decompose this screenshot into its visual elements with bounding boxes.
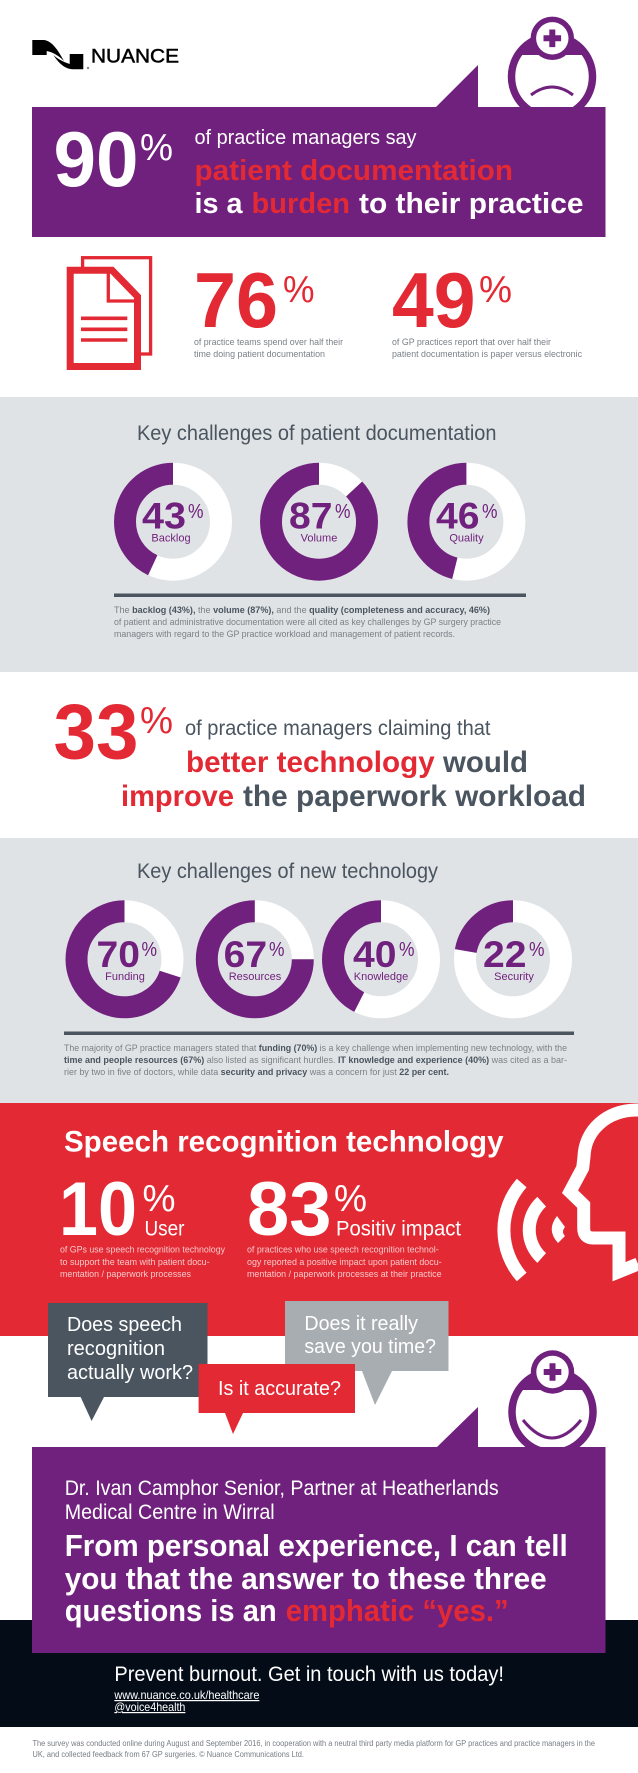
headline: better technology: better technology [186,746,435,779]
stat: 76%: % [283,269,314,311]
attribution [65,1477,499,1524]
band: new technology background [0,838,638,1103]
speech bubble: does speech recognition work: recognition [67,1338,165,1360]
donut: knowledge 40%: Knowledge [354,971,408,983]
stat: 10% users: % [142,1178,176,1220]
donut: security 22%: 22 [483,933,526,975]
call to action [113,1663,504,1714]
speech bubble: is it accurate [199,1364,355,1434]
donut: resources 67% [207,911,303,1007]
donut: quality 46%: % [482,501,498,523]
donut: security 22%: Security [494,971,534,983]
donut: resources 67%: Resources [229,971,282,983]
stat: 49% [392,256,582,359]
speech bubble: does speech recognition work: Does speech [67,1314,182,1336]
donut: backlog 43%: 43 [142,494,186,536]
text: patient documentation explanation: The backlog (43%), the volume (87%), and the quality (completeness and accuracy, 46%) [114,604,490,615]
headline: better technology: of practice managers claiming that [185,716,491,740]
headline: better technology [121,716,586,813]
speech bubble: save you time: save you time? [304,1336,436,1358]
quote text: emphatic “yes.” [286,1593,509,1628]
stat: 10% users [59,1167,225,1279]
speech bubble: does speech recognition work [48,1303,208,1421]
stat: 10% users: 10 [59,1167,137,1252]
call to action: @voice4health [114,1700,185,1714]
stat: 49%: % [479,269,512,311]
stat: 83% positive impact: % [334,1178,367,1220]
stat: 76% [194,256,343,359]
stat: 10% users: User [144,1218,185,1241]
stat: 83% positive impact: mentation / paperwork processes at their practice [247,1268,442,1279]
heading: speech recognition technology: Speech recognition technology [64,1126,504,1159]
headline: better technology: would [442,746,528,779]
stat: 49%: of GP practices report that over half their [392,336,551,347]
text: patient documentation explanation: of patient and administrative documentation were all cited as key challenges by GP surgery practice [114,616,501,627]
text: new technology explanation: The majority of GP practice managers stated that funding (70%) is a key challenge when implementing new technology, with the [64,1042,567,1053]
donut: funding 70% [76,911,172,1007]
band: patient documentation background [0,397,638,672]
panel: doctor quote [32,1407,606,1653]
speech bubble: save you time: Does it really [304,1313,418,1335]
headline text: burden [252,188,350,220]
donut: backlog 43% [125,474,221,570]
footnote [32,1738,595,1759]
heading: key challenges of patient documentation: Key challenges of patient documentation [137,422,496,445]
stat: 10% users: to support the team with patient docu- [60,1256,210,1267]
donut: security 22%: % [529,939,545,961]
text: new technology explanation [64,1042,567,1077]
logo: Nuance: NUANCE [91,46,179,68]
icon: speaking head [504,1110,638,1277]
text: patient documentation explanation: managers with regard to the GP practice workload and management of patient records. [114,628,455,639]
donut: volume 87%: % [335,501,351,523]
donut: resources 67%: 67 [224,933,267,975]
headline text: to their practice [359,188,584,220]
band: footer call to action background [0,1620,638,1727]
footnote: UK, and collected feedback from 67 GP surgeries. © Nuance Communications Ltd. [32,1749,304,1759]
call to action: www.nuance.co.uk/healthcare [113,1688,260,1702]
icon: sad doctor [512,17,592,117]
stat: 83% positive impact: 83 [247,1167,332,1252]
stat: 83% positive impact [247,1167,461,1279]
headline text: is a [194,188,243,220]
headline: better technology: improve [121,780,234,813]
text: new technology explanation: time and people resources (67%) also listed as significant hurdles. IT knowledge and experience (40%) was cited as a bar- [64,1054,567,1065]
speech bubble: is it accurate: Is it accurate? [218,1378,341,1400]
donut: resources 67%: % [269,939,285,961]
headline text: patient documentation [194,155,513,187]
logo: Nuance [32,40,179,69]
attribution: Medical Centre in Wirral [65,1501,275,1524]
text: new technology explanation: rier by two in five of doctors, while data security and privacy was a concern for just 22 per cent. [64,1066,449,1077]
donut: knowledge 40%: % [399,939,415,961]
donut: knowledge 40%: 40 [353,933,396,975]
heading: key challenges of new technology: Key challenges of new technology [137,860,438,883]
stat: 90%: 90 [54,115,138,203]
text: patient documentation explanation [114,604,501,639]
headline text: of practice managers say [194,126,417,149]
stat: 10% users: mentation / paperwork processes [60,1268,191,1279]
stat: 10% users: of GPs use speech recognition technology [60,1244,225,1255]
stat: 83% positive impact: Positiv impact [336,1218,461,1241]
stat: 83% positive impact: ogy reported a positive impact upon patient docu- [247,1256,442,1267]
band: speech recognition background [0,1103,638,1336]
speech bubble: does speech recognition work: actually work? [67,1362,193,1384]
speech bubble: save you time [285,1301,448,1405]
stat: 76%: 76 [194,256,278,344]
quote text [65,1528,568,1628]
stat: 49%: patient documentation is paper versus electronic [392,348,582,359]
icon: documents [70,258,151,366]
donut: quality 46%: 46 [436,494,480,536]
donut: quality 46% [418,474,514,570]
attribution: Dr. Ivan Camphor Senior, Partner at Heatherlands [65,1477,499,1500]
call to action: Prevent burnout. Get in touch with us today! [114,1663,504,1686]
headline: better technology: the paperwork workload [243,780,586,813]
donut: funding 70%: 70 [96,933,140,975]
stat: 90%: % [140,127,173,169]
stat: 33%: 33 [54,688,138,776]
donut: quality 46%: Quality [449,533,484,545]
donut: volume 87%: Volume [301,533,337,545]
donut: volume 87%: 87 [289,494,332,536]
donut: security 22% [465,911,561,1007]
quote text: From personal experience, I can tell [65,1528,568,1563]
stat: 83% positive impact: of practices who use speech recognition technol- [247,1244,439,1255]
stat: 33%: % [140,700,173,742]
donut: backlog 43%: Backlog [151,533,191,545]
donut: funding 70%: Funding [105,971,145,983]
quote text: you that the answer to these three [65,1561,547,1596]
donut: volume 87% [271,474,367,570]
donut: backlog 43%: % [188,501,204,523]
icon: happy doctor [512,1350,593,1452]
stat: 76%: of practice teams spend over half their [194,336,343,347]
quote text: questions is an [65,1593,277,1628]
stat: 49%: 49 [392,256,476,344]
stat: 76%: time doing patient documentation [194,348,325,359]
donut: funding 70%: % [142,939,157,961]
headline text [194,126,584,220]
panel: 90% headline [32,65,606,237]
donut: knowledge 40% [333,911,429,1007]
